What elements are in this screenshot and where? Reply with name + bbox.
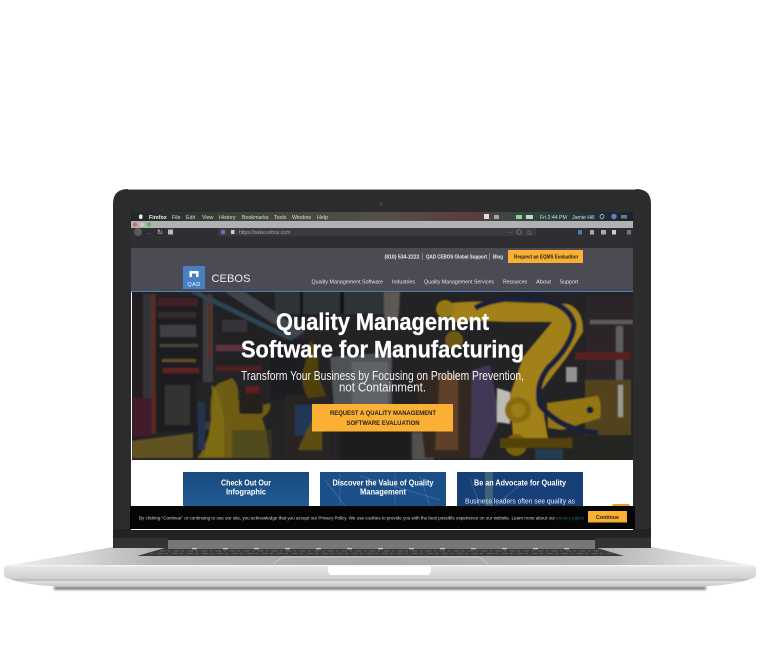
laptop mockup showing the CEBOS website [4,189,756,592]
card: infographic [183,472,309,506]
card: advocate for quality [457,472,583,506]
thumb notch [328,566,431,575]
macOS menu bar: Help [317,215,328,221]
hero call-to-action button: REQUEST A QUALITY MANAGEMENT [330,410,436,417]
macOS menu bar: Fri 2:44 PM [540,215,567,221]
keyboard deck [5,547,755,566]
hero call-to-action button: SOFTWARE EVALUATION [346,420,420,427]
logo: CEBOS [212,273,250,285]
yellow bins [132,433,193,458]
continue button: Continue [596,515,619,521]
hero subtitle [241,369,524,394]
browser chrome: ☆ [526,229,532,237]
card: infographic: Infographic [226,488,266,496]
navigation: Quality Management Software [312,280,383,286]
front edge [4,565,756,586]
macOS menu bar: Firefox [149,215,167,221]
webcam [379,202,383,206]
site header [131,248,633,292]
macOS menu bar: Jamie Hill [572,215,594,221]
navigation: Support [560,280,579,286]
cookie bar: By clicking "Continue" or continuing to use our site, you acknowledge that you accept our Privacy Policy. We use cookies to provide you with the best possible experience on our website. Learn more about our [139,516,555,522]
phone and utility links [384,254,503,260]
base shadow [54,587,706,590]
macOS menu bar: View [202,215,214,221]
card: advocate for quality: Business leaders often see quality as [465,496,575,506]
navigation: Quality Management Services [424,280,494,286]
hero title: Quality Management [276,309,489,336]
logo [183,266,250,289]
navigation: Industries [392,280,415,286]
card: value of quality management: Management [360,488,406,496]
trackpad [273,557,488,564]
navigation: Resources [503,280,527,286]
hero subtitle: Transform Your Business by Focusing on Problem Prevention, [241,369,524,383]
screen [130,212,635,530]
header button [508,250,583,263]
hero title: Software for Manufacturing [241,336,524,364]
right yellow robot arm [442,301,583,438]
macOS menu bar: Window [292,215,311,221]
card: value of quality management [320,472,446,506]
continue button [588,511,627,522]
card: value of quality management: Discover the Value of Quality [332,478,434,488]
macOS menu bar: File [172,215,181,221]
hero factory photo [132,292,633,460]
macOS menu bar [131,212,633,221]
hero subtitle: not Containment. [339,380,426,394]
keyboard [137,548,624,556]
logo: QAD [187,282,201,288]
browser chrome: ··· [507,230,512,236]
cookie bar: privacy policy. [556,516,585,522]
left factory [134,440,142,458]
browser chrome: https://www.cebos.com [239,230,290,236]
blue cable [475,298,598,433]
cookie bar [130,506,635,529]
right factory [585,296,633,381]
laptop lid [113,189,651,548]
navigation: About [536,280,552,286]
browser chrome [131,221,633,248]
laptop base [4,540,756,590]
phone and utility links: QAD CEBOS Global Support [426,254,487,260]
card: advocate for quality: Be an Advocate for Quality [474,478,566,488]
hero title [241,309,524,364]
centre [275,292,400,314]
macOS menu bar: History [219,215,236,221]
browser chrome: → [146,230,152,236]
navigation [312,280,579,286]
macOS menu bar: Tools [274,215,287,221]
left yellow robot [197,378,270,458]
chat tab [612,504,630,508]
phone and utility links: Blog [493,254,503,260]
phone and utility links: (810) 534-2222 [384,254,420,260]
macOS menu bar: Bookmarks [242,215,269,221]
browser chrome: ↻ [157,230,163,236]
card: infographic: Check Out Our [221,478,272,488]
macOS menu bar: Edit [186,215,196,221]
hero call-to-action button [312,404,453,432]
header button: Request an EQMS Evaluation [514,254,578,260]
